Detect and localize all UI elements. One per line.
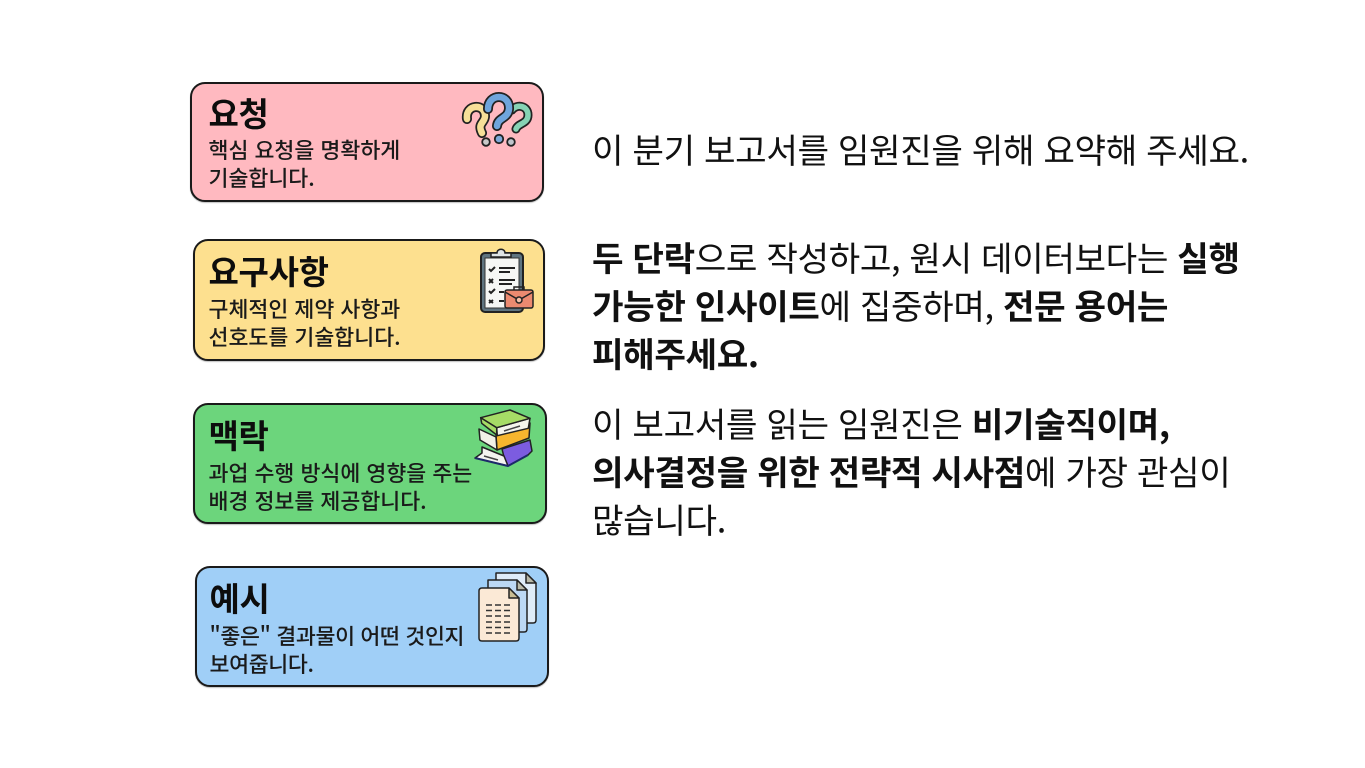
text block: 요청 본문: 이 분기 보고서를 임원진을 위해 요약해 주세요. [592, 123, 1249, 173]
text: 요구사항 설명 [208, 293, 401, 352]
text: 요구사항 설명: 구체적인 제약 사항과 [208, 293, 400, 324]
text: 예시 설명: 보여줍니다. [210, 648, 314, 678]
text: 맥락 설명: 배경 정보를 제공합니다. [208, 484, 427, 516]
text: 요청 설명: 핵심 요청을 명확하게 [208, 134, 400, 165]
text: 맥락 설명 [208, 457, 472, 516]
panel: 예시 [195, 566, 549, 687]
text: 예시 설명: "좋은" 결과물이 어떤 것인지 [210, 620, 464, 651]
text block: 맥락 본문: 의사결정을 위한 전략적 시사점에 가장 관심이 [592, 445, 1230, 495]
text block: 맥락 본문: 많습니다. [592, 493, 726, 543]
text: 예시 설명 [210, 620, 464, 678]
panel: 요구사항 [193, 239, 545, 361]
text: 요청 설명: 기술합니다. [208, 162, 315, 192]
text block: 요구사항 본문: 가능한 인사이트에 집중하며, 전문 용어는 [592, 279, 1168, 329]
text block: 요구사항 본문: 두 단락으로 작성하고, 원시 데이터보다는 실행 [592, 231, 1240, 281]
text block: 요구사항 본문: 피해주세요. [592, 327, 759, 377]
icon: stack of books [474, 409, 533, 467]
text block: 요구사항 본문 [592, 231, 1240, 377]
heading: 요구사항: 요구사항 [208, 246, 329, 294]
text: 요구사항 설명: 선호도를 기술합니다. [208, 320, 401, 352]
heading: 요청: 요청 [208, 88, 269, 136]
heading: 맥락: 맥락 [208, 410, 269, 458]
text: 맥락 설명: 과업 수행 방식에 영향을 주는 [208, 457, 472, 488]
icon: question marks [462, 92, 532, 147]
icon: clipboard and briefcase [480, 248, 534, 313]
text block: 맥락 본문: 이 보고서를 읽는 임원진은 비기술직이며, [592, 397, 1170, 447]
heading: 예시: 예시 [210, 573, 270, 621]
text block: 맥락 본문 [592, 397, 1230, 543]
text: 요청 설명 [208, 134, 400, 192]
icon: stacked documents [478, 572, 537, 642]
panel: 맥락 [193, 403, 547, 524]
panel: 요청 [190, 82, 544, 202]
